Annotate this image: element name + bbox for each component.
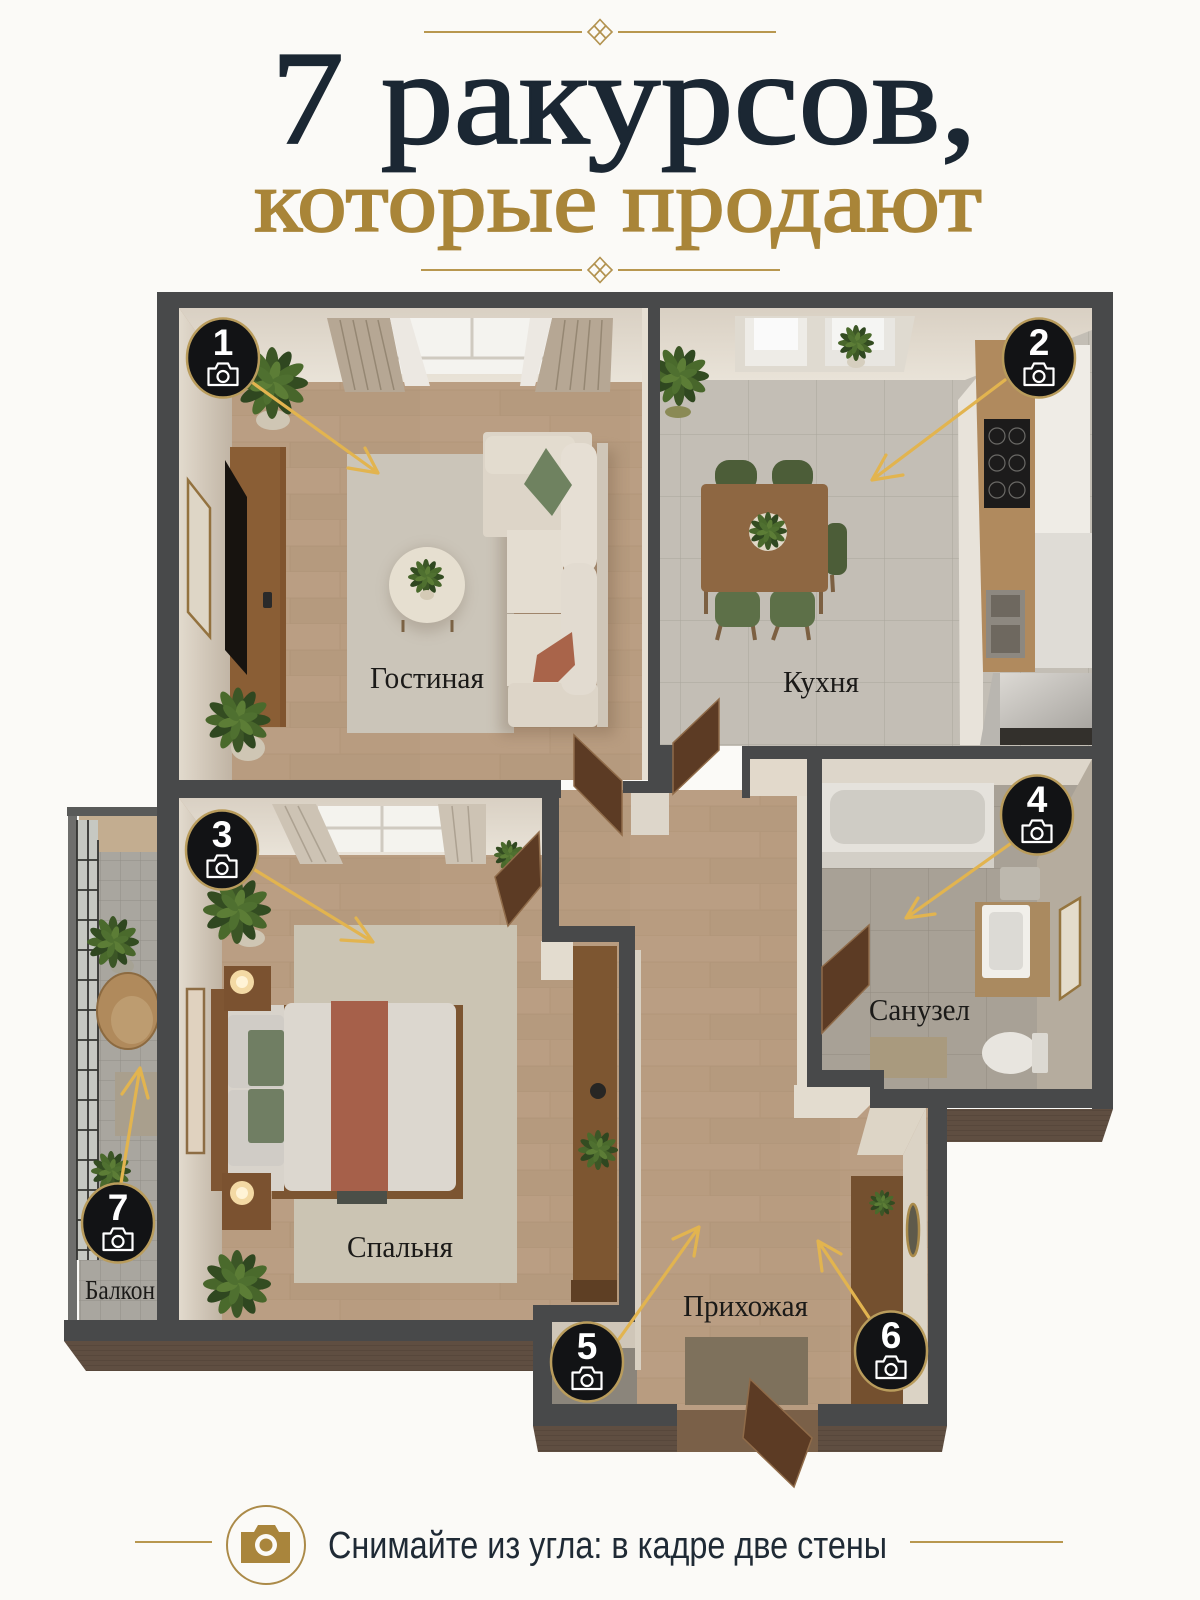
entry mat — [685, 1337, 808, 1405]
badge 1 — [187, 318, 259, 398]
bathtub — [822, 783, 994, 868]
badge 3: 3 — [212, 814, 232, 855]
wall picture — [1060, 898, 1080, 999]
vanity — [975, 902, 1050, 997]
tip text: Снимайте из угла: в кадре две стены — [328, 1525, 887, 1567]
badge 7: 7 — [108, 1187, 128, 1228]
label: kitchen: Кухня — [783, 664, 859, 699]
rug — [294, 925, 517, 1283]
icon: camera in circle — [227, 1506, 305, 1584]
room: living room — [179, 308, 648, 780]
label: bedroom: Спальня — [347, 1229, 453, 1264]
exterior fascia — [64, 1109, 1113, 1452]
badge 6: 6 — [881, 1315, 901, 1356]
top ornament divider — [424, 20, 776, 44]
badge 5: 5 — [577, 1326, 597, 1367]
kitchen window — [735, 316, 915, 372]
subtitle: которые продают: которые продают — [254, 154, 982, 251]
badge 4: 4 — [1027, 779, 1048, 820]
doors — [495, 699, 869, 1487]
console along left wall — [571, 946, 618, 1302]
doorway wall faces — [631, 793, 669, 835]
badge 2: 2 — [1029, 322, 1049, 363]
badge 1: 1 — [213, 322, 233, 363]
hallway floor — [555, 790, 930, 1410]
wall picture — [187, 989, 204, 1153]
plants — [203, 840, 524, 1318]
corner plant — [649, 346, 709, 418]
coffee table — [389, 547, 465, 632]
arrow 7 — [121, 1068, 148, 1183]
badge 3 — [186, 810, 258, 890]
badge 5 — [551, 1322, 623, 1402]
toilet cistern — [1000, 867, 1040, 900]
small balcony mat — [115, 1072, 158, 1136]
badge 6 — [855, 1312, 927, 1390]
balcony lattice rail — [67, 807, 158, 1320]
walls — [64, 292, 1113, 1426]
tv console and tv — [225, 447, 286, 727]
bedroom window with curtains — [272, 804, 486, 864]
dining table with chairs — [701, 460, 847, 640]
balcony — [67, 807, 159, 1320]
room: kitchen — [649, 308, 1092, 746]
bed — [211, 989, 463, 1204]
wall picture — [188, 480, 210, 637]
badge 2 — [1003, 318, 1075, 398]
wicker chair — [97, 973, 159, 1049]
balcony plants — [87, 916, 139, 1191]
label: hallway: Прихожая — [683, 1288, 808, 1323]
closet niche — [552, 950, 641, 1406]
label: bathroom: Санузел — [869, 992, 970, 1027]
toilet — [982, 1032, 1048, 1074]
arrow 2 — [872, 380, 1005, 480]
bath mat — [870, 1037, 947, 1078]
title: 7 ракурсов,: 7 ракурсов, — [271, 24, 977, 172]
arrow 6 — [818, 1241, 870, 1319]
arrow 5 — [619, 1227, 699, 1339]
round mirror — [907, 1204, 919, 1256]
kitchen cabinets — [958, 340, 1092, 745]
label: living room: Гостиная — [370, 660, 484, 695]
badge 7 — [82, 1184, 154, 1262]
corner sofa — [483, 432, 615, 735]
arrow 1 — [253, 383, 378, 473]
beige wall returns — [541, 941, 573, 980]
camera arrows — [121, 380, 1010, 1339]
label: balcony: Балкон — [85, 1275, 155, 1305]
badge 4 — [1001, 776, 1073, 854]
arrow 3 — [255, 870, 373, 942]
footer tip — [135, 1506, 1063, 1584]
floor plan — [64, 292, 1113, 1487]
arrow 4 — [906, 844, 1010, 918]
nightstands with lamps — [222, 966, 271, 1230]
room: bathroom — [822, 759, 1092, 1091]
room: bedroom — [179, 798, 622, 1320]
plants — [206, 347, 308, 761]
rug — [347, 454, 514, 733]
window with curtains — [327, 318, 613, 392]
bottom ornament divider — [421, 258, 780, 282]
hallway furniture — [541, 759, 928, 1405]
console along right wall — [851, 1176, 903, 1404]
